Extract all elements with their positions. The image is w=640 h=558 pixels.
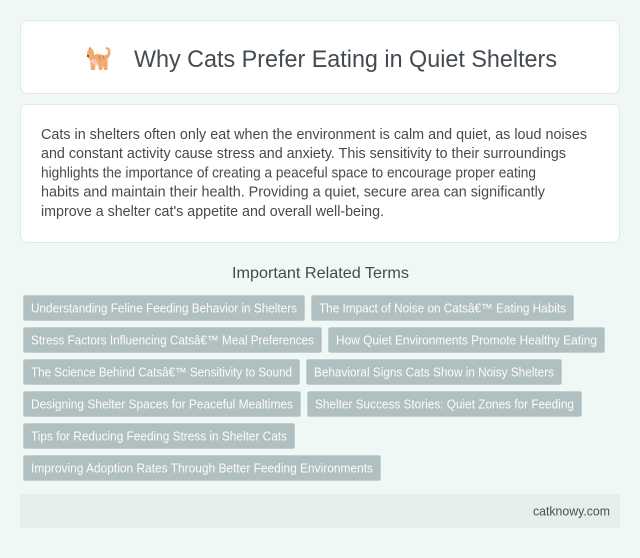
tag [24,328,322,352]
tags: related terms [24,296,604,480]
footer: site name: catknowy.com [533,504,610,518]
text block: description [41,127,587,220]
footer [20,494,620,528]
title: Why Cats Prefer Eating in Quiet Shelters [134,46,557,73]
panel: description [20,104,620,242]
tag: Improving Adoption Rates Through Better Feeding Environments [31,462,373,476]
text block: description: highlights the importance of creating a peaceful space to encourage proper eating [41,166,536,182]
tag: The Science Behind Catsâ€™ Sensitivity to Sound [31,366,292,380]
tag [308,392,582,416]
tag [306,360,562,384]
tag: The Impact of Noise on Catsâ€™ Eating Habits [319,302,566,316]
tag [24,424,294,448]
tag: Stress Factors Influencing Catsâ€™ Meal Preferences [31,334,314,348]
text block: description: and constant activity cause stress and anxiety. This sensitivity to their surroundings [41,146,566,162]
text block: description: improve a shelter cat's appetite and overall well-being. [41,204,384,220]
tag: How Quiet Environments Promote Healthy Eating [336,334,597,348]
tag: Behavioral Signs Cats Show in Noisy Shelters [314,366,554,380]
tag: Understanding Feline Feeding Behavior in Shelters [31,302,297,316]
tag: Tips for Reducing Feeding Stress in Shelter Cats [31,430,287,444]
tag [328,328,604,352]
tag [24,296,304,320]
panel: title header [20,20,620,94]
tag [24,360,300,384]
text block: description: Cats in shelters often only eat when the environment is calm and quiet, as loud noises [41,127,587,143]
tag [312,296,574,320]
heading: related terms: Important Related Terms [232,265,409,282]
tag [24,392,300,416]
tag [24,456,380,480]
text block: description: habits and maintain their health. Providing a quiet, secure area can significantly [41,184,546,200]
icon: cat [87,46,111,70]
tag: Shelter Success Stories: Quiet Zones for Feeding [315,398,574,412]
tag: Designing Shelter Spaces for Peaceful Mealtimes [31,398,293,412]
